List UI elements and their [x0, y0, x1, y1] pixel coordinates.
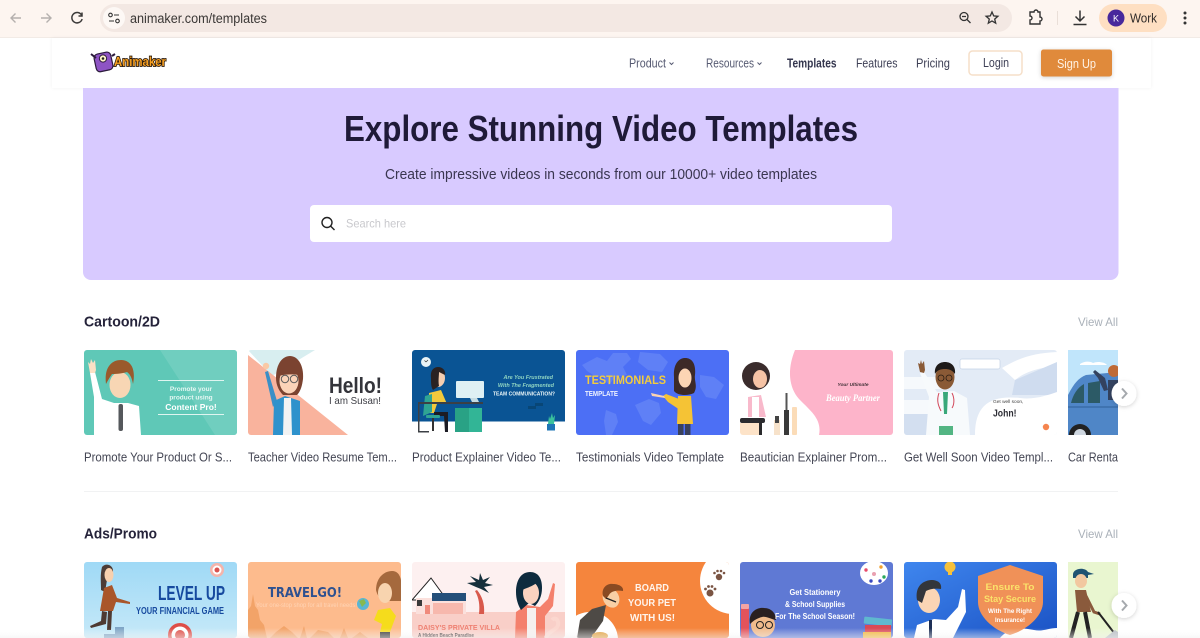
card: Insurance: Insurance! [995, 618, 1025, 624]
card: Hello Susan [248, 350, 380, 435]
paws [704, 570, 725, 596]
search box [310, 205, 892, 242]
search box: Search here [346, 216, 406, 230]
woman walking [101, 565, 113, 592]
card: Board Your Pet [562, 548, 766, 638]
skyline [248, 594, 368, 638]
card: Testimonials: TEMPLATE [585, 389, 618, 398]
profile pill: Work [1130, 12, 1158, 26]
card: School Supplies [740, 561, 893, 638]
card: Beauty Partner [740, 350, 893, 435]
card: Insurance [904, 562, 1057, 638]
hero heading: Explore Stunning Video Templates [344, 108, 858, 149]
card: Level Up [84, 562, 237, 638]
card text: BOARD [635, 582, 669, 594]
woman [742, 362, 770, 390]
carousel next button [1112, 593, 1136, 618]
nav: Features: Features [856, 56, 898, 70]
plant [548, 413, 555, 424]
clock [421, 357, 431, 367]
card label: Teacher Video Resume Tem... [248, 450, 397, 464]
card label: Car Renta [1068, 450, 1118, 464]
icon: reload [72, 12, 82, 23]
white wave [1000, 628, 1057, 638]
kid [751, 613, 775, 637]
address text: animaker.com/templates [130, 11, 267, 26]
logo: Animaker [114, 54, 166, 69]
shield [978, 565, 1043, 635]
hero subtitle: Create impressive videos in seconds from our 10000+ video templates [385, 167, 817, 183]
globe [357, 598, 369, 610]
button: Sign Up [1041, 50, 1112, 76]
profile pill [1099, 4, 1167, 32]
section heading: Cartoon/2D: Cartoon/2D [84, 314, 160, 330]
card: Hello Susan: I am Susan! [329, 395, 381, 407]
card: Get Well Soon: John! [993, 408, 1016, 420]
icon: star [986, 12, 998, 23]
carousel next button [1112, 381, 1136, 406]
world map [582, 352, 724, 435]
man [90, 372, 141, 435]
icon: zoom [960, 12, 970, 23]
woman [376, 571, 402, 601]
card: Insurance: With The Right [988, 609, 1032, 615]
house [412, 578, 447, 600]
profile pill: K [1113, 14, 1119, 24]
card label: Product Explainer Video Te... [412, 450, 561, 464]
icon: site settings [103, 7, 125, 29]
orange dot [1043, 424, 1049, 430]
card label: Testimonials Video Template [576, 450, 724, 464]
link: View All: View All [1078, 527, 1118, 541]
card text: Hello! [329, 373, 382, 398]
section divider [84, 491, 1118, 492]
nav: Templates: Templates [787, 56, 837, 70]
nav: Resources: Resources [706, 56, 754, 70]
button: Login: Login [983, 56, 1009, 70]
doctor [920, 372, 970, 435]
link: View All: View All [1078, 315, 1118, 329]
card: Content Pro [84, 350, 237, 435]
palette [860, 561, 888, 585]
address bar [100, 4, 1012, 32]
palm [475, 590, 484, 614]
card label: Get Well Soon Video Templ... [904, 450, 1053, 464]
card: Testimonials [576, 350, 729, 435]
man with pet [562, 612, 618, 638]
card: Travelgo: Your one-stop shop for all travel needs! [256, 602, 357, 609]
card label: Promote Your Product Or S... [84, 450, 232, 464]
card text: Promote your [170, 386, 213, 393]
card text: TEAM COMMUNICATION? [493, 392, 556, 398]
monitor [456, 381, 484, 398]
cabinet [455, 408, 469, 432]
card text: WITH US! [630, 612, 675, 624]
button: Sign Up: Sign Up [1057, 56, 1096, 71]
icon: download [1074, 10, 1086, 24]
card: Insurance: Stay Secure [984, 594, 1036, 604]
woman at desk [438, 372, 445, 387]
card: Level Up: YOUR FINANCIAL GAME [136, 606, 224, 617]
icon: forward arrow [41, 14, 51, 22]
card text [628, 582, 677, 624]
woman presenter [663, 394, 678, 408]
card text: Get Stationery [790, 588, 841, 597]
card text: Your Ultimate [837, 382, 869, 388]
bottom fade [0, 628, 1200, 638]
hero panel [83, 88, 1118, 280]
card: Travelgo [248, 562, 402, 638]
card text: & School Supplies [785, 600, 845, 609]
icon: back arrow [11, 14, 21, 22]
cosmetics [774, 420, 780, 435]
card text: YOUR PET [628, 597, 677, 609]
card: Get Well Soon [904, 350, 1057, 435]
card text: Content Pro! [165, 402, 217, 412]
card text [493, 375, 556, 398]
bulb [944, 562, 956, 572]
nav: Product: Product [629, 56, 666, 70]
card: Car Rental (cut off) [1068, 350, 1120, 435]
card: Daisy's Villa [412, 562, 565, 638]
section heading: Ads/Promo: Ads/Promo [84, 526, 157, 542]
card text: TESTIMONIALS [585, 375, 666, 387]
logo [91, 51, 166, 72]
card text: With The Fragmented [498, 383, 555, 389]
card text: DAISY'S PRIVATE VILLA [418, 623, 500, 632]
card: Product Explainer [412, 350, 565, 435]
card text: Are You Frustrated [502, 375, 554, 381]
card: Beauty Partner: Beauty Partner [825, 394, 880, 404]
woman [515, 583, 555, 638]
card text [775, 588, 855, 621]
card text: TRAVELGO! [268, 586, 342, 601]
icon: extensions [1030, 10, 1042, 24]
woman [265, 371, 277, 407]
card text: product using [169, 394, 213, 402]
icon: menu dots [1184, 12, 1186, 24]
card: Walking man (cut off) [1068, 562, 1118, 638]
books [864, 617, 892, 626]
card label: Beautician Explainer Prom... [740, 450, 887, 464]
pencil [741, 606, 749, 638]
site navigation bar [52, 38, 1151, 88]
button: Login [969, 51, 1022, 75]
browser toolbar [0, 0, 1200, 38]
man [914, 589, 966, 638]
card text: Get well soon, [993, 399, 1023, 405]
card text [158, 380, 224, 415]
card text: For The School Season! [775, 612, 855, 621]
card text: Ensure To [986, 582, 1035, 592]
nav: Pricing: Pricing [916, 56, 950, 70]
targets [210, 563, 224, 577]
card text: LEVEL UP [158, 583, 225, 605]
